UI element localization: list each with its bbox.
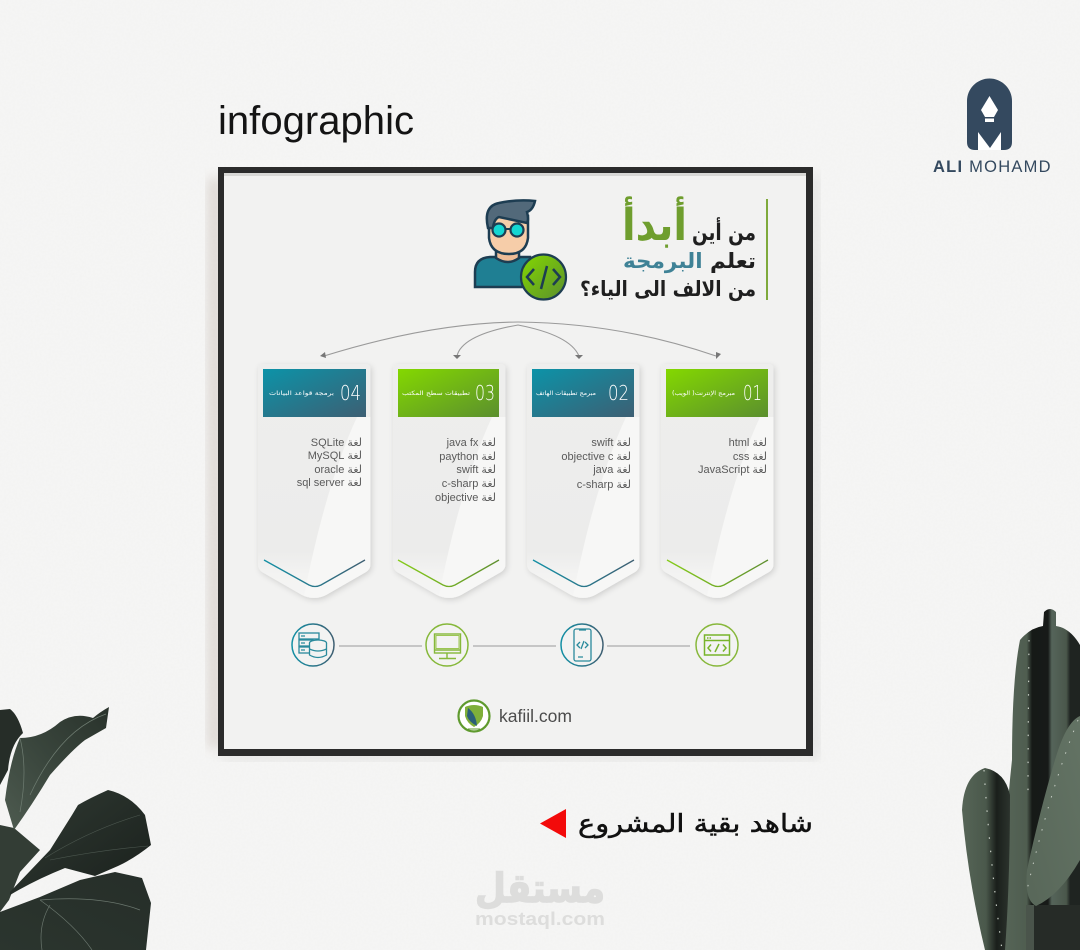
- kafiil wordmark: kafiil.com: [499, 706, 572, 726]
- icon: kafiil shield: [458, 700, 490, 732]
- card header: تطبيقات سطح المكتب: [402, 390, 470, 397]
- icon: database: [292, 624, 334, 666]
- icon: programmer avatar: [475, 200, 566, 300]
- card header: 01: [743, 381, 762, 405]
- card 04: databases: [258, 364, 370, 598]
- language list: [435, 437, 496, 504]
- icon: desktop monitor: [426, 624, 468, 666]
- card header: 02: [608, 381, 629, 405]
- language list: [698, 437, 767, 476]
- title line: learn programming: تعلم البرمجة: [623, 249, 756, 273]
- language list: [297, 437, 362, 489]
- frame shadow: [208, 175, 819, 760]
- card 01: web: [661, 364, 774, 598]
- heading: infographic: infographic: [218, 99, 414, 143]
- watermark: mostaql: [475, 866, 605, 929]
- language list: لغة oracle: [314, 464, 362, 476]
- title line: from where: من أين: [692, 216, 756, 246]
- title line: from A to Z: من الالف الى الياء؟: [580, 277, 756, 301]
- card header: برمجة قواعد البيانات: [269, 390, 334, 397]
- card body: [661, 364, 774, 598]
- language list: لغة css: [733, 451, 767, 463]
- brand: kafiil.com: [458, 700, 572, 732]
- call to action: [540, 809, 813, 839]
- watermark: mostaql: مستقل: [475, 866, 605, 912]
- card header: [666, 369, 768, 417]
- card header: 04: [340, 381, 361, 405]
- card header: [263, 369, 366, 417]
- language list: لغة objective c: [561, 451, 631, 463]
- language list: لغة c-sharp: [577, 479, 631, 491]
- language list: لغة JavaScript: [698, 464, 767, 476]
- language list: لغة paython: [439, 451, 496, 463]
- language list: لغة SQLite: [311, 437, 362, 449]
- language list: [561, 437, 631, 491]
- connector arcs: [320, 322, 721, 359]
- language list: لغة MySQL: [308, 450, 362, 462]
- logo: Ali Mohamd: [933, 79, 1052, 176]
- title word: start: أبدأ: [622, 196, 687, 251]
- card body: [258, 364, 370, 598]
- card header: 03: [475, 381, 495, 405]
- plant: fiddle leaf: [0, 707, 151, 950]
- icon: red arrow: [540, 809, 566, 838]
- language list: لغة html: [729, 437, 767, 449]
- plant: cactus: [962, 609, 1080, 950]
- card header: [532, 369, 634, 417]
- call to action text: شاهد بقية المشروع: [578, 809, 813, 839]
- panel: framed poster: [218, 167, 813, 756]
- card header: [398, 369, 499, 417]
- card 03: desktop apps: [393, 364, 506, 598]
- title divider: [766, 199, 768, 300]
- language list: لغة sql server: [297, 477, 362, 489]
- card body: [393, 364, 506, 598]
- icon: pen nib letter A: [967, 79, 1012, 150]
- card 02: mobile apps: [527, 364, 640, 598]
- language list: لغة c-sharp: [442, 478, 496, 490]
- language list: لغة objective: [435, 492, 496, 504]
- icon: mobile code: [561, 624, 603, 666]
- card body: [527, 364, 640, 598]
- icon: web code window: [696, 624, 738, 666]
- language list: لغة java fx: [446, 437, 496, 449]
- logo wordmark: ALI MOHAMD: [933, 158, 1052, 176]
- language list: لغة swift: [591, 437, 631, 449]
- poster title: [580, 196, 768, 301]
- language list: لغة swift: [456, 464, 496, 476]
- card header: مبرمج تطبيقات الهاتف: [536, 390, 596, 397]
- language list: لغة java: [592, 464, 631, 476]
- watermark: mostaql: mostaql.com: [475, 908, 605, 929]
- card header: مبرمج الإنترنت( الويب): [672, 390, 735, 397]
